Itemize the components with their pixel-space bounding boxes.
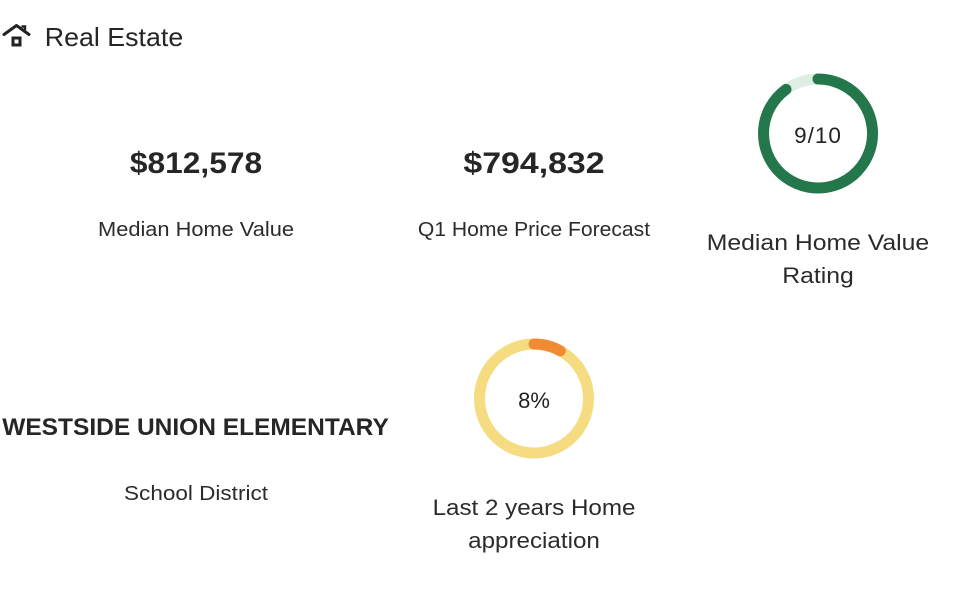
label: median home value: Median Home Value: [98, 219, 293, 241]
label: last 2 years home appreciation: appreciation: [468, 528, 599, 553]
label: Q1 home price forecast: Q1 Home Price Forecast: [417, 219, 650, 241]
label: school district: School District: [124, 483, 267, 505]
donut chart: home appreciation 8%: 8%: [518, 388, 550, 413]
label: last 2 years home appreciation: [432, 495, 635, 553]
donut chart: home appreciation 8%: [474, 338, 594, 458]
icon: house: [2, 24, 31, 46]
stat: median home value: $812,578: [129, 147, 262, 180]
label: median home value rating: [707, 230, 929, 288]
stat: Q1 home price forecast: $794,832: [463, 147, 604, 180]
label: last 2 years home appreciation: Last 2 years Home: [432, 495, 635, 520]
label: median home value rating: Rating: [782, 263, 854, 288]
donut chart: median home value rating 9/10: 9/10: [794, 123, 842, 148]
label: median home value rating: Median Home Value: [707, 230, 929, 255]
heading: Real Estate: Real Estate: [45, 22, 183, 52]
donut chart: median home value rating 9/10: [758, 74, 878, 194]
stat: school district name: WESTSIDE UNION ELEMENTARY: [2, 414, 389, 441]
